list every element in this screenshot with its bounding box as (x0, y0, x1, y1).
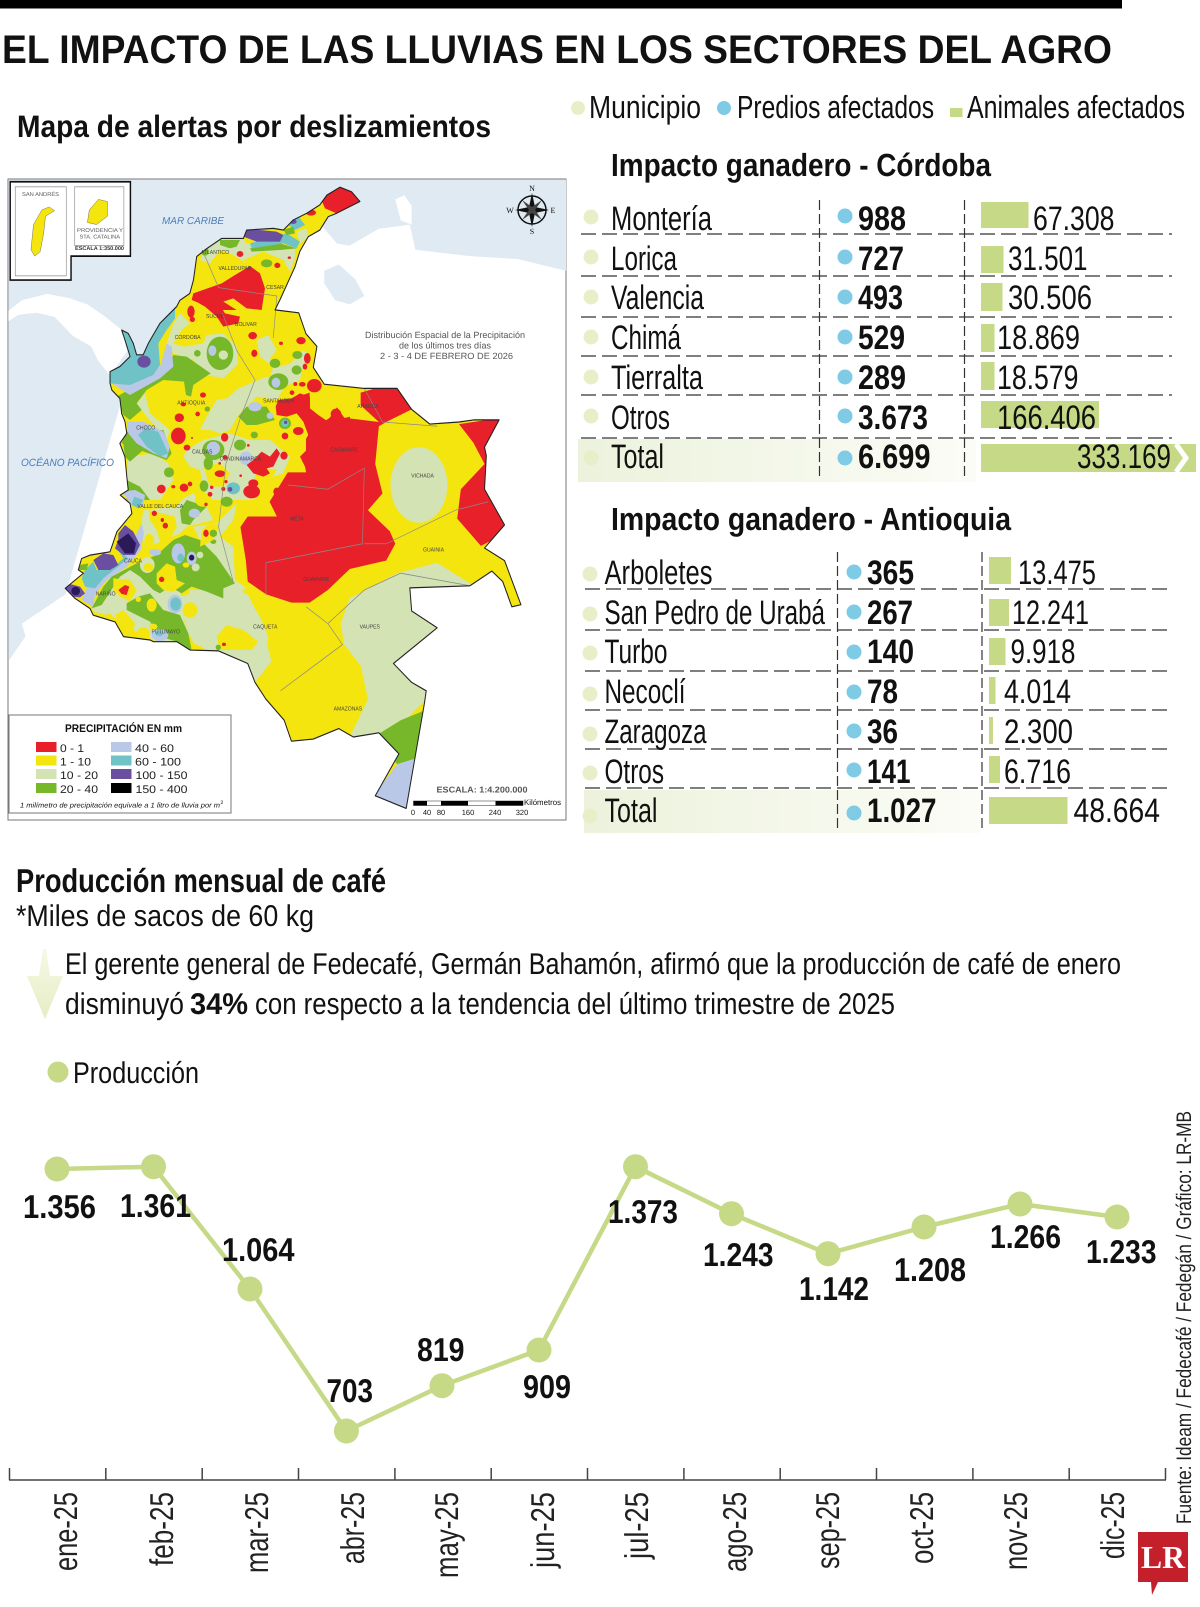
colombia outline and labels: ARAUCA (357, 403, 379, 409)
row: Total: 333.169 (1077, 438, 1171, 476)
map legend (9, 715, 231, 813)
map labels: ESCALA 1:350.000 (75, 246, 124, 252)
icon: islands inset (10, 182, 130, 280)
month labels (47, 1492, 1131, 1578)
data labels: 1.373 (608, 1193, 678, 1230)
row: Chimá: Chimá (611, 319, 681, 357)
row: Tierralta (584, 359, 1078, 397)
chart legend: Producción (73, 1057, 199, 1090)
icon: compass rose: E (551, 206, 556, 215)
colombia outline and labels: VICHADA (411, 472, 434, 479)
row: Necoclí: 78 (867, 673, 898, 711)
row: Total: Total (604, 792, 658, 830)
colombia outline and labels: SUCRE (206, 312, 224, 319)
data labels: 1.356 (23, 1188, 96, 1225)
colombia outline and labels: CESAR (266, 283, 284, 290)
row: Total (584, 438, 1196, 476)
colombia outline and labels: GUAINIA (423, 546, 444, 553)
row: Zaragoza: 36 (867, 713, 898, 751)
text block: statement: con respecto a la tendencia del último trimestre de 2025 (255, 988, 895, 1021)
icon: compass rose: S (530, 227, 534, 236)
data labels: 703 (326, 1372, 373, 1409)
row: San Pedro de Urabá: 267 (867, 594, 913, 632)
row: Otros (582, 753, 1071, 791)
row: Turbo: 140 (867, 633, 914, 671)
text block: statement: disminuyó (65, 988, 184, 1021)
row: Arboletes: Arboletes (604, 554, 712, 592)
data labels: 819 (417, 1331, 464, 1368)
row: Arboletes (582, 554, 1096, 592)
data line (57, 1167, 1117, 1431)
map labels: MAR CARIBE (162, 216, 224, 227)
heading: Córdoba table: Impacto ganadero - Córdoba (611, 147, 991, 183)
colombia outline and labels (10, 182, 521, 808)
text block: statement: 34% (190, 988, 248, 1021)
month labels: jun-25 (524, 1492, 561, 1569)
zones: caribbean north (192, 185, 363, 310)
colombia outline and labels: VALLE DEL CAUCA (137, 503, 183, 509)
map legend: PRECIPITACIÓN EN mm (65, 722, 182, 735)
source credit: Fuente: Ideam / Fedecafé / Fedegán / Gráfico: LR-MB (1173, 1111, 1196, 1524)
map labels: OCÉANO PACÍFICO (21, 456, 114, 469)
text block: statement (65, 948, 1121, 1021)
row: Lorica: Lorica (611, 240, 677, 278)
row: Otros: 141 (867, 753, 910, 791)
icon: compass rose: W (506, 206, 514, 215)
data labels: 909 (523, 1368, 571, 1405)
row: Montería (584, 200, 1114, 238)
row: Necoclí: 4.014 (1004, 673, 1071, 711)
map scale bar (411, 784, 561, 817)
data labels: 1.233 (1086, 1233, 1156, 1270)
top black bar (0, 0, 1122, 8)
zones: east and south (186, 388, 510, 810)
row: Turbo: Turbo (604, 633, 668, 671)
table legend: Municipio (589, 89, 701, 125)
month labels: oct-25 (903, 1492, 940, 1564)
map scale bar: 40 (423, 808, 431, 817)
colombia outline and labels: CHOCO (136, 424, 155, 431)
axis (9, 1468, 1166, 1480)
map labels: 2 - 3 - 4 DE FEBRERO DE 2026 (380, 351, 513, 361)
panel: Córdoba table (578, 200, 1196, 482)
table legend: Predios afectados (737, 89, 934, 125)
colombia outline and labels: CALDAS (192, 448, 212, 455)
icon: LR logo (1138, 1532, 1188, 1595)
row: Lorica: 31.501 (1008, 240, 1088, 278)
map scale bar: 160 (462, 808, 474, 817)
map legend: 60 - 100 (135, 756, 181, 768)
data labels: 1.266 (990, 1218, 1061, 1255)
map scale bar: 80 (437, 808, 445, 817)
colombia outline and labels: CASANARE (330, 446, 358, 453)
colombia outline and labels: VAUPES (360, 623, 380, 630)
row: Total (582, 792, 1160, 830)
row: Arboletes: 365 (867, 554, 914, 592)
row: Tierralta: Tierralta (611, 359, 703, 397)
icon: compass rose (506, 184, 556, 236)
row: Otros: 3.673 (858, 399, 928, 437)
data labels: 1.243 (703, 1236, 774, 1273)
panel: Antioquia table (582, 552, 1172, 833)
map legend: 1 - 10 (60, 756, 91, 768)
icon: compass rose: N (529, 184, 535, 193)
map legend: 20 - 40 (60, 784, 98, 796)
subheading: unit: *Miles de sacos de 60 kg (16, 900, 314, 933)
row: Turbo (582, 633, 1076, 671)
month labels: sep-25 (809, 1492, 846, 1569)
month labels: ene-25 (47, 1492, 84, 1571)
data labels: 1.208 (894, 1251, 966, 1288)
colombia outline and labels: ANTIOQUIA (177, 399, 206, 406)
map scale bar: ESCALA: 1:4.200.000 (436, 784, 528, 794)
data labels (23, 1187, 1156, 1409)
row: San Pedro de Urabá (582, 594, 1089, 632)
map labels: Distribución Espacial de la Precipitación (365, 330, 525, 340)
map legend: 0 - 1 (60, 743, 84, 755)
colombia outline and labels: CUNDINAMARCA (220, 455, 262, 462)
row: Tierralta: 18.579 (997, 359, 1078, 397)
month labels: feb-25 (143, 1492, 180, 1566)
row: Zaragoza (582, 713, 1073, 751)
month labels: dic-25 (1094, 1492, 1131, 1559)
data points (44, 1154, 1130, 1444)
month labels: abr-25 (334, 1492, 371, 1564)
heading: Antioquia table: Impacto ganadero - Antioquia (611, 501, 1011, 537)
colombia outline and labels: CAUCA (124, 557, 142, 564)
table legend (571, 89, 1185, 125)
row: Chimá: 18.869 (997, 319, 1080, 357)
row: Valencia: 30.506 (1008, 279, 1092, 317)
colombia outline and labels: NARIÑO (96, 590, 116, 597)
map legend: 150 - 400 (136, 784, 188, 796)
row: Necoclí (582, 673, 1071, 711)
map scale bar: 320 (516, 808, 528, 817)
map labels: de los últimos tres días (399, 340, 491, 350)
month labels: ago-25 (716, 1492, 753, 1572)
icon: down arrow (27, 949, 63, 1019)
department boundaries (204, 254, 488, 691)
row: Total: 48.664 (1074, 792, 1160, 830)
row: Zaragoza: 2.300 (1004, 713, 1073, 751)
row: Zaragoza: Zaragoza (604, 713, 707, 751)
colombia outline and labels: CAQUETA (253, 623, 278, 630)
row: Otros: 6.716 (1004, 753, 1071, 791)
row: Turbo: 9.918 (1010, 633, 1076, 671)
icon: LR logo: LR (1141, 1539, 1186, 1575)
data labels: 1.064 (222, 1231, 295, 1268)
data labels: 1.142 (799, 1270, 869, 1307)
row: Necoclí: Necoclí (604, 673, 686, 711)
row: Montería: 988 (858, 200, 906, 238)
row: San Pedro de Urabá: San Pedro de Urabá (604, 594, 825, 632)
map legend: 10 - 20 (60, 770, 98, 782)
row: Lorica (584, 240, 1088, 278)
map legend: 2 (220, 800, 224, 806)
row: Otros: 166.406 (997, 399, 1096, 437)
colombia outline and labels: CORDOBA (175, 333, 201, 340)
row: Otros: Otros (604, 753, 664, 791)
data labels: 1.361 (120, 1187, 191, 1224)
map legend: 1 milímetro de precipitación equivale a 1 litro de lluvia por m (20, 802, 220, 810)
map labels: STA. CATALINA (80, 234, 120, 240)
row: Total: 1.027 (867, 792, 936, 830)
month labels: mar-25 (238, 1492, 275, 1573)
row: Valencia: Valencia (611, 279, 704, 317)
map legend: 100 - 150 (136, 770, 188, 782)
colombia outline and labels: AMAZONAS (334, 705, 362, 712)
map labels (21, 191, 525, 469)
colombia precipitation zones (66, 188, 520, 808)
map scale bar: 0 (411, 808, 415, 817)
colombia outline and labels: ATLANTICO (201, 249, 229, 255)
month labels: nov-25 (997, 1492, 1034, 1570)
panel: precipitation map (8, 179, 566, 820)
row: Arboletes: 13.475 (1018, 554, 1096, 592)
map legend: 40 - 60 (135, 743, 174, 755)
map base: sea and neighbours (8, 180, 566, 661)
map labels: SAN ANDRÉS (22, 191, 59, 198)
row: Montería: 67.308 (1033, 200, 1114, 238)
title: EL IMPACTO DE LAS LLUVIAS EN LOS SECTORES DEL AGRO (2, 28, 1112, 72)
line chart: monthly coffee production (9, 1154, 1166, 1578)
map labels: PROVIDENCIA Y (77, 228, 123, 234)
row: San Pedro de Urabá: 12.241 (1012, 594, 1089, 632)
row: Otros: Otros (611, 399, 670, 437)
colombia outline and labels: BOLIVAR (235, 321, 257, 328)
colombia outline and labels: GUAVIARE (303, 575, 329, 582)
month labels: jul-25 (618, 1492, 655, 1560)
map scale bar: 240 (489, 808, 501, 817)
row: Chimá (584, 319, 1080, 357)
zones: southwest (63, 490, 268, 650)
zones: andes and pacific (110, 300, 350, 500)
colombia outline and labels: PUTUMAYO (151, 628, 180, 635)
colombia outline and labels: META (290, 515, 304, 522)
map scale bar: Kilómetros (524, 798, 561, 807)
heading: map: Mapa de alertas por deslizamientos (17, 109, 491, 144)
row: Valencia (584, 279, 1092, 317)
row: Total: 6.699 (858, 438, 930, 476)
map frame (8, 179, 566, 820)
row: Otros (584, 399, 1099, 437)
row: Total: Total (611, 438, 664, 476)
row: Chimá: 529 (858, 319, 905, 357)
row: Lorica: 727 (858, 240, 904, 278)
month labels: may-25 (428, 1492, 465, 1578)
colombia outline and labels: SANTANDER (263, 397, 294, 404)
heading: coffee production: Producción mensual de café (16, 862, 386, 899)
row: Valencia: 493 (858, 279, 903, 317)
row: Montería: Montería (611, 200, 712, 238)
colombia outline and labels: VALLEDUPAR (218, 265, 251, 271)
row: Tierralta: 289 (858, 359, 906, 397)
